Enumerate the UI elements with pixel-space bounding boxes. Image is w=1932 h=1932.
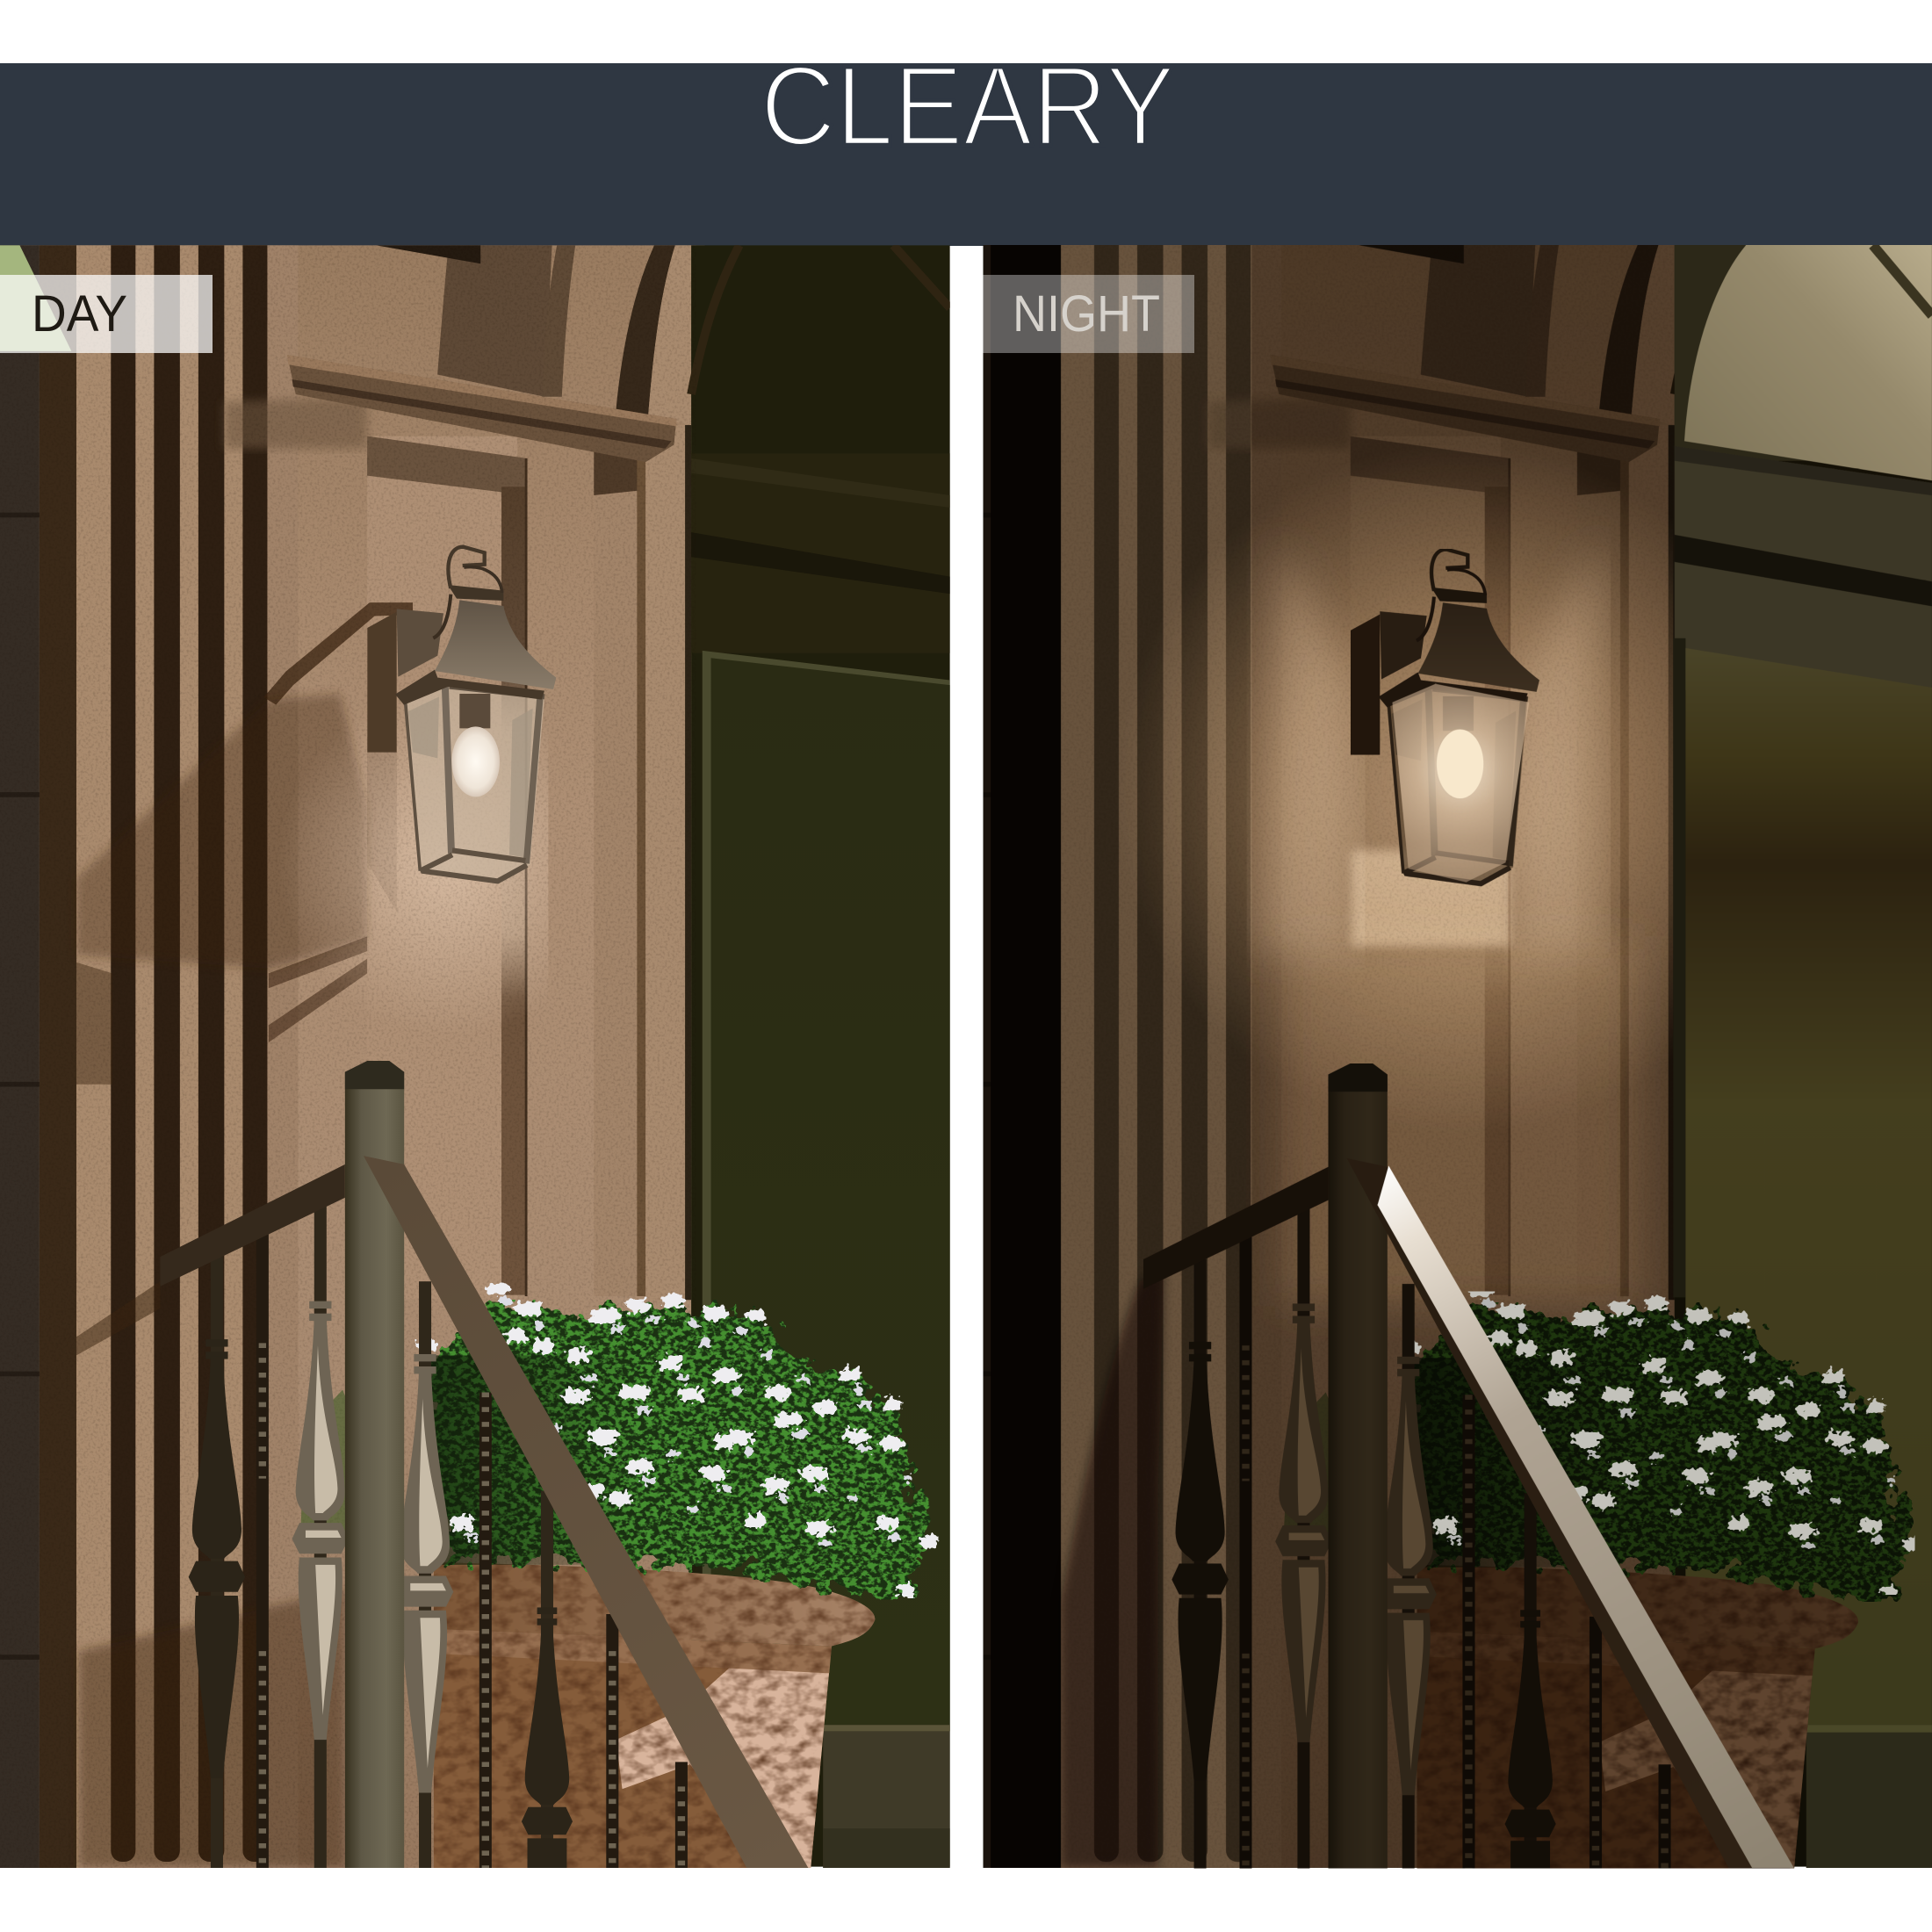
lit diagonal handrail bbox=[1378, 1165, 1794, 1868]
recessed wall panel bbox=[367, 436, 528, 1299]
green foliage at top-left corner bbox=[0, 245, 71, 351]
vertical pilaster grooves bbox=[76, 228, 299, 1868]
pilaster on right of panel bbox=[594, 425, 691, 1300]
picture frame fragment bbox=[376, 245, 480, 263]
roof underside bbox=[395, 670, 544, 705]
panel: night photo bbox=[984, 228, 1932, 1871]
window frame bbox=[703, 651, 950, 1731]
window arch glass bbox=[691, 245, 950, 1867]
lantern glass glow bbox=[1392, 684, 1529, 883]
window frame night bbox=[1673, 638, 1685, 1297]
spindle 4 bbox=[522, 1607, 573, 1868]
window header bands bbox=[691, 453, 950, 653]
dark left column bbox=[991, 245, 1061, 1868]
window pane bbox=[711, 658, 950, 1731]
left light lobe bbox=[1257, 542, 1355, 948]
panel: day photo bbox=[0, 228, 950, 1868]
lantern fixture bbox=[367, 547, 556, 881]
lantern interior wall bbox=[408, 696, 533, 858]
title banner bbox=[0, 43, 1932, 246]
upper wall shadow bbox=[437, 245, 552, 397]
window header bands night bbox=[1675, 446, 1932, 690]
arch mouldings bbox=[542, 245, 705, 425]
wall texture night bbox=[1061, 245, 1673, 1868]
lantern glass bbox=[406, 682, 544, 881]
wedge shadow over lower column bbox=[76, 962, 112, 1085]
bulb socket bbox=[459, 694, 490, 728]
sunlight patch below lantern bbox=[278, 690, 548, 1035]
spindle rods bbox=[211, 1201, 553, 1868]
lit window pane bbox=[1685, 648, 1932, 1727]
planter pot bbox=[434, 1562, 875, 1868]
window arch line bbox=[691, 245, 950, 394]
label: NIGHT bbox=[982, 275, 1194, 353]
title: CLEARY: CLEARY bbox=[761, 43, 1175, 169]
lantern back plate shadow bbox=[367, 737, 397, 912]
window sill night bbox=[1806, 1725, 1932, 1868]
cornice bbox=[287, 355, 676, 462]
lower wall wash bbox=[1281, 936, 1639, 1306]
diagonal handrail bbox=[364, 1156, 808, 1868]
light bulb bbox=[451, 726, 500, 797]
rail shadow across lower wall bbox=[1061, 1266, 1164, 1868]
night railing and lantern, dimmed bbox=[1143, 549, 1791, 1871]
window sill base bbox=[823, 1725, 950, 1868]
night facade, dimmed bbox=[984, 228, 1932, 1868]
spindle 3 bbox=[397, 1354, 453, 1792]
label: DAY: DAY bbox=[32, 285, 127, 342]
night flowers bbox=[1409, 1291, 1914, 1595]
label: DAY bbox=[0, 275, 213, 353]
spindle 2 bbox=[292, 1301, 349, 1740]
flower plant foliage bbox=[422, 1300, 930, 1599]
label: NIGHT: NIGHT bbox=[1013, 285, 1160, 342]
stone strip at far left bbox=[0, 245, 40, 1868]
shadow beneath cornice bbox=[224, 397, 367, 449]
lantern light on wall bbox=[1061, 245, 1673, 1868]
dark arch diagonal bbox=[1873, 245, 1932, 315]
lantern frame bbox=[406, 682, 544, 881]
night pot and foliage, dimmed bbox=[1284, 1302, 1914, 1871]
night bulb bbox=[1437, 730, 1483, 798]
light pool beneath lantern bbox=[1352, 850, 1510, 947]
large soft lantern shadow bbox=[76, 694, 367, 969]
day cast shadows on wall bbox=[76, 602, 413, 1868]
side handrail bbox=[160, 1164, 345, 1287]
twisted balusters bbox=[263, 1232, 681, 1868]
right light lobe bbox=[1513, 542, 1602, 948]
lantern neck and handle bbox=[433, 547, 503, 638]
dark arch surround bbox=[1675, 245, 1932, 461]
wall-plate shadow bbox=[367, 612, 397, 753]
diagonal lantern shadow lines bbox=[269, 936, 367, 1042]
lift on pilaster stripes bbox=[1061, 245, 1252, 1868]
plant side sprigs bbox=[300, 1390, 370, 1534]
lantern roof bbox=[435, 600, 556, 689]
facade wall bbox=[0, 245, 696, 1868]
lantern arm shadow curve bbox=[263, 602, 413, 705]
foliage shadow on lower wall bbox=[79, 1590, 345, 1868]
newel post bbox=[345, 1061, 404, 1868]
shaded left side of the plant bbox=[419, 1355, 641, 1565]
white flowers bbox=[425, 1289, 932, 1592]
back plate bbox=[397, 609, 443, 677]
dark column edge bbox=[40, 245, 76, 1868]
spindle highlights bbox=[306, 1345, 446, 1768]
wall texture bbox=[0, 245, 696, 1868]
ornamental spindle balusters bbox=[189, 1339, 245, 1778]
lit arch window bbox=[1684, 245, 1932, 480]
